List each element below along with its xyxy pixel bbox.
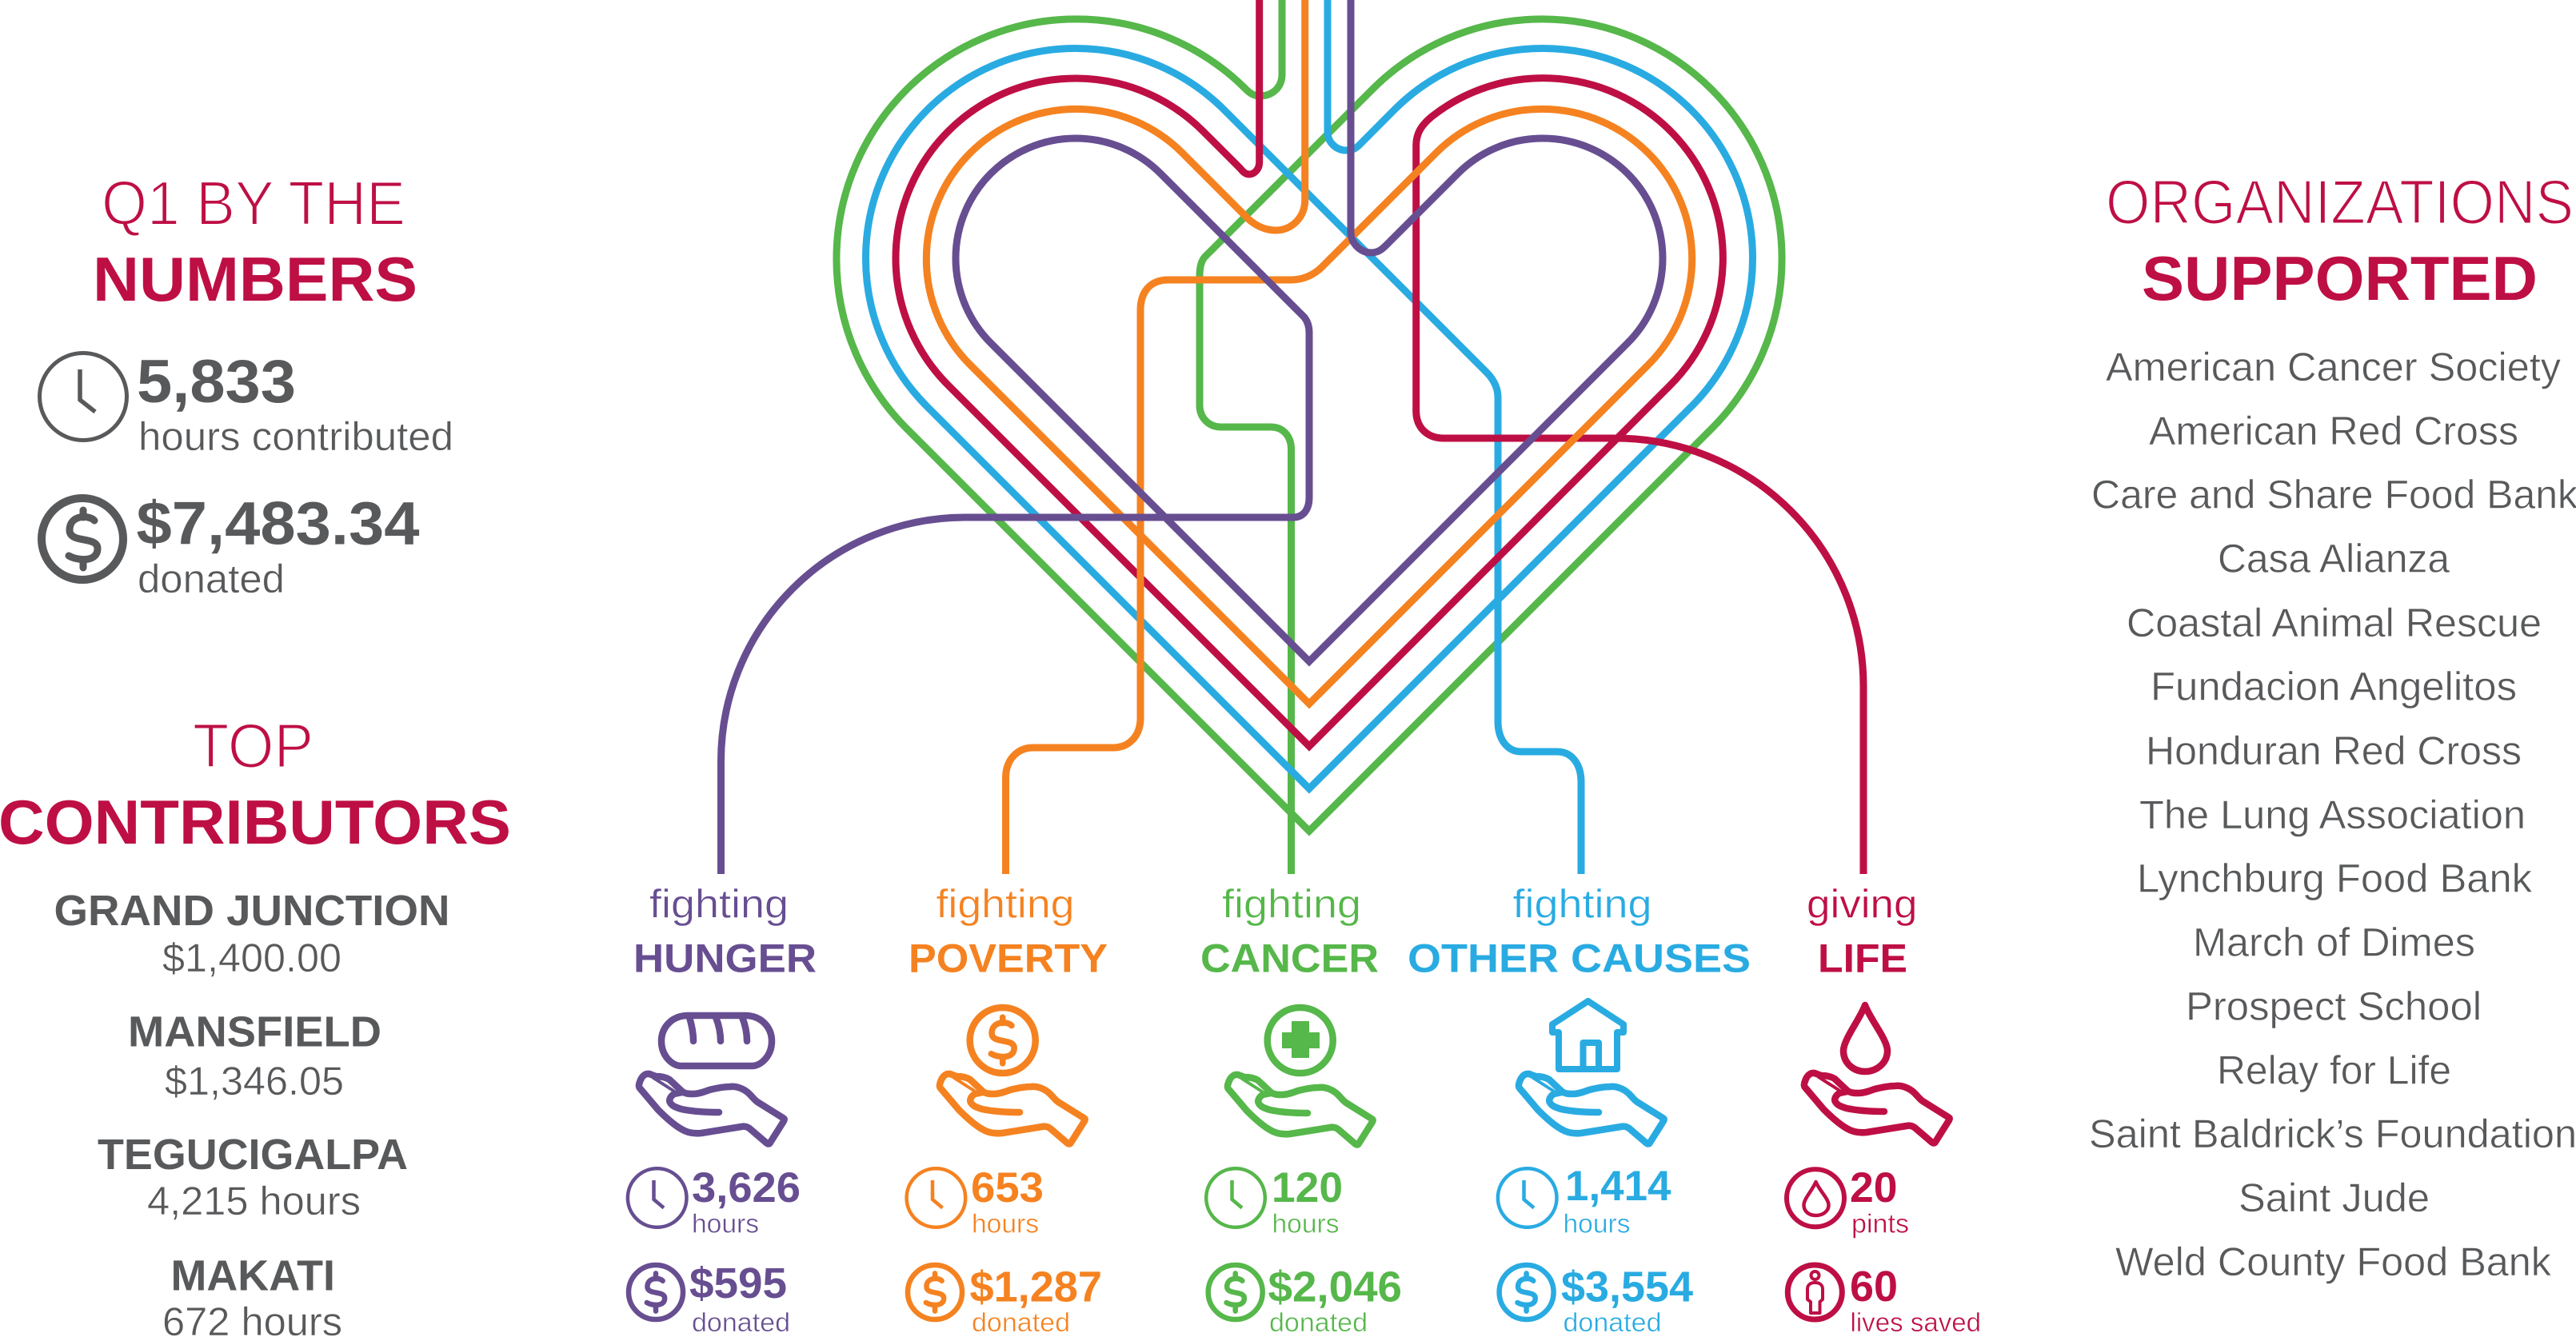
contributor: Mansfield: [128, 1008, 381, 1104]
stat: hours contributed: hours contributed: [138, 414, 453, 459]
stat: hours: hours: [972, 1209, 1039, 1238]
panel: fighting other causes: [1408, 881, 1751, 1337]
icon: drop in ring: [1787, 1169, 1844, 1227]
stat: hours: [692, 1164, 801, 1238]
panel: fighting poverty: [907, 881, 1108, 1337]
icon: clock: [907, 1168, 965, 1227]
list: organizations: Weld County Food Bank: [2115, 1239, 2552, 1284]
heading: organizations supported: SUPPORTED: [2142, 243, 2538, 313]
heading: top contributors: CONTRIBUTORS: [0, 787, 511, 857]
stat: donated: donated: [138, 557, 285, 601]
heading: organizations supported: [2106, 166, 2574, 313]
icon: clock: [1498, 1168, 1556, 1227]
icon: clock: [40, 353, 126, 440]
stat: donated: [136, 489, 419, 601]
contributor: Mansfield: MANSFIELD: [128, 1008, 381, 1056]
icon: medical cross in hand: [1228, 1008, 1373, 1145]
list: organizations: American Cancer Society: [2106, 345, 2561, 389]
stat: donated: donated: [692, 1307, 790, 1337]
stat: hours: hours: [1563, 1209, 1630, 1238]
list: organizations: The Lung Association: [2139, 792, 2526, 837]
icon: clock: [628, 1168, 686, 1227]
list: organizations: Prospect School: [2186, 984, 2482, 1028]
contributor: Mansfield: $1,346.05: [165, 1059, 344, 1104]
icon: house in hand: [1519, 1001, 1664, 1143]
icon: dollar coin: [908, 1265, 962, 1319]
stat: hours contributed: [137, 348, 453, 459]
stat: pints: 20: [1850, 1164, 1897, 1211]
heading: Q1 by the numbers: [93, 168, 417, 314]
heading: top contributors: TOP: [193, 710, 314, 780]
line: crimson giving life: [896, 0, 1863, 874]
stat: pints: pints: [1851, 1209, 1909, 1238]
contributor: Grand Junction: $1,400.00: [162, 936, 341, 980]
line: orange poverty: [926, 0, 1692, 874]
stat: hours contributed: 5,833: [137, 348, 296, 416]
list: organizations: Care and Share Food Bank: [2091, 472, 2576, 517]
heading: top contributors: [0, 710, 511, 857]
heading: fighting other causes: [1408, 881, 1751, 980]
list: organizations: Saint Baldrick’s Foundation: [2089, 1112, 2576, 1156]
stat: hours: hours: [692, 1209, 759, 1238]
stat: lives saved: 60: [1850, 1263, 1898, 1311]
stat: lives saved: lives saved: [1851, 1307, 1981, 1337]
stat: donated: $595: [689, 1259, 787, 1307]
icon: dollar coin: [1500, 1265, 1554, 1319]
contributor: Grand Junction: GRAND JUNCTION: [54, 887, 449, 935]
list: organizations: Lynchburg Food Bank: [2137, 856, 2533, 900]
heading: giving life: [1807, 881, 1918, 980]
stat: donated: [1561, 1263, 1693, 1337]
icon: dollar coin: [629, 1265, 683, 1319]
stat: donated: [1268, 1263, 1402, 1337]
stat: donated: donated: [1563, 1307, 1662, 1337]
heading: fighting cancer: [1200, 881, 1379, 980]
icon: bread in hand: [639, 1016, 785, 1143]
heading: fighting hunger: HUNGER: [633, 936, 817, 980]
stat: donated: $2,046: [1268, 1263, 1402, 1311]
panel: Q1 by the numbers: [40, 168, 453, 601]
icon: dollar coin: [1208, 1265, 1263, 1319]
stat: hours: 653: [971, 1164, 1044, 1211]
panel: fighting cancer: [1200, 881, 1402, 1337]
heading: fighting other causes: OTHER CAUSES: [1408, 936, 1751, 980]
stat: hours: [1272, 1164, 1343, 1238]
stat: donated: [969, 1263, 1102, 1337]
stat: donated: $3,554: [1561, 1263, 1693, 1311]
heading: giving life: LIFE: [1818, 936, 1907, 980]
heading: fighting poverty: POVERTY: [909, 936, 1108, 980]
stat: donated: [689, 1259, 790, 1337]
icon: person in ring: [1787, 1265, 1842, 1319]
contributor: Tegucigalpa: 4,215 hours: [147, 1179, 361, 1223]
icon: blood drop in hand: [1804, 1005, 1950, 1143]
heading: fighting cancer: CANCER: [1200, 936, 1379, 980]
list: organizations: [2089, 345, 2576, 1284]
stat: donated: $1,287: [969, 1263, 1102, 1311]
heading: Q1 by the numbers: Q1 BY THE: [102, 168, 405, 238]
list: organizations: Coastal Animal Rescue: [2127, 601, 2542, 645]
heading: fighting other causes: fighting: [1513, 881, 1652, 926]
list: organizations: Casa Alianza: [2218, 536, 2450, 581]
stat: donated: $7,483.34: [136, 489, 419, 558]
contributor: Makati: MAKATI: [171, 1252, 335, 1300]
icon: dollar coin: [42, 498, 123, 580]
stat: hours: [971, 1164, 1044, 1238]
icon: coin in hand: [940, 1008, 1085, 1143]
list: organizations: March of Dimes: [2193, 920, 2475, 964]
line: blue other causes: [865, 0, 1753, 874]
stat: donated: donated: [1269, 1307, 1368, 1337]
list: organizations: American Red Cross: [2149, 409, 2518, 453]
heading: giving life: giving: [1807, 881, 1918, 926]
stat: hours: [1563, 1163, 1671, 1238]
panel: fighting hunger: [628, 881, 817, 1337]
contributor: Tegucigalpa: [98, 1131, 408, 1223]
stat: hours: 120: [1272, 1164, 1343, 1211]
stat: lives saved: [1850, 1263, 1981, 1337]
contributor: Grand Junction: [54, 887, 449, 980]
icon: clock: [1206, 1168, 1265, 1227]
stat: hours: 1,414: [1565, 1163, 1671, 1210]
panel: top contributors: [0, 710, 511, 1337]
stat: hours: 3,626: [692, 1164, 801, 1211]
heading: fighting poverty: fighting: [936, 881, 1075, 926]
heading: fighting poverty: [909, 881, 1108, 980]
panel: giving life: [1787, 881, 1981, 1337]
contributor: Tegucigalpa: TEGUCIGALPA: [98, 1131, 408, 1179]
heading: fighting hunger: [633, 881, 817, 980]
line: purple hunger: [721, 0, 1663, 874]
contributor: Makati: [162, 1252, 342, 1337]
line: green cancer: [837, 0, 1782, 874]
panel: organizations supported: [2089, 166, 2576, 1284]
heading: fighting hunger: fighting: [649, 881, 789, 926]
list: organizations: Fundacion Angelitos: [2151, 664, 2517, 708]
list: organizations: Honduran Red Cross: [2146, 728, 2522, 773]
stat: pints: [1850, 1164, 1909, 1238]
chart: heart made of five coloured lines: [721, 0, 1863, 874]
list: organizations: Saint Jude: [2239, 1175, 2430, 1220]
stat: donated: donated: [972, 1307, 1070, 1337]
heading: fighting cancer: fighting: [1222, 881, 1361, 926]
stat: hours: hours: [1272, 1209, 1339, 1238]
list: organizations: Relay for Life: [2217, 1048, 2451, 1092]
heading: Q1 by the numbers: NUMBERS: [93, 244, 417, 314]
